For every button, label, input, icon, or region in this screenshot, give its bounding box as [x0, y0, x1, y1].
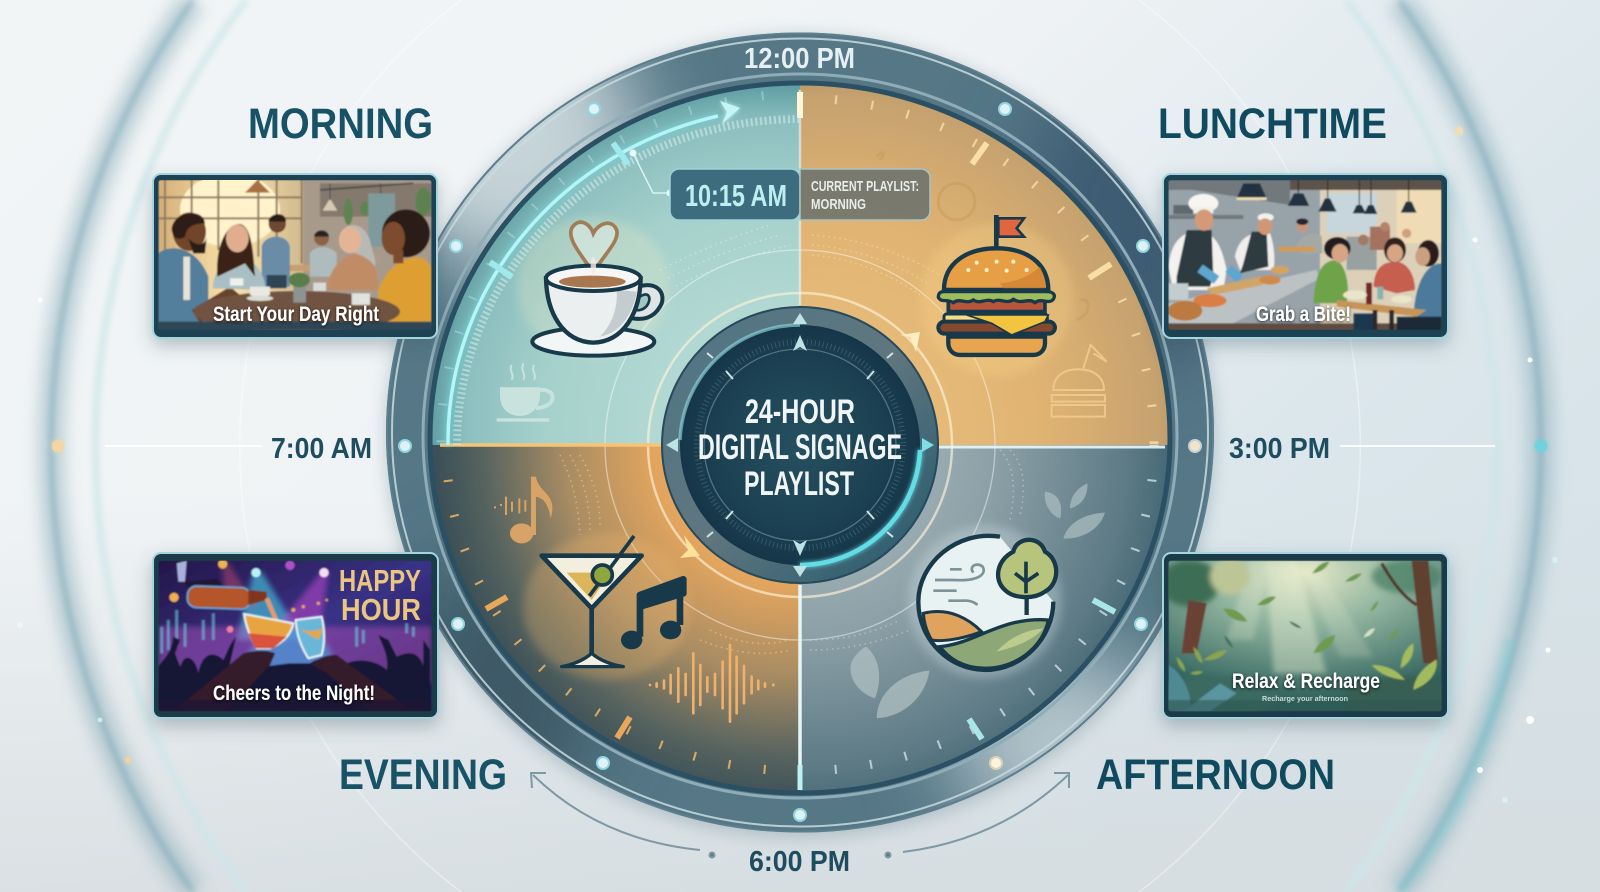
caption: Start Your Day Right	[213, 303, 379, 326]
arrow: evening direction	[531, 773, 714, 858]
morning cafe scene	[158, 173, 432, 332]
icon: burger	[920, 215, 1073, 377]
happy hour sign: HOUR	[341, 592, 421, 627]
sparkle dots	[17, 127, 1558, 803]
happy hour sign: HAPPY	[339, 563, 421, 598]
icon: small ghost coffee	[497, 363, 553, 422]
heading: MORNING: MORNING	[248, 100, 433, 148]
time label: 12:00 PM: 12:00 PM	[744, 43, 855, 75]
icon: ghost leaves upper	[1045, 483, 1105, 539]
panel: lunchtime screen	[1163, 174, 1448, 338]
arrow: afternoon direction	[886, 773, 1069, 858]
center hub	[662, 307, 938, 583]
hub title: 24-HOUR	[745, 393, 855, 431]
panel: afternoon screen	[1147, 553, 1460, 718]
caption: Grab a Bite!	[1256, 303, 1351, 326]
heading: AFTERNOON: AFTERNOON	[1096, 751, 1335, 799]
dial outer ring	[380, 10, 1240, 838]
dotted wave textures	[560, 225, 1023, 653]
dial face quadrants	[430, 83, 1170, 793]
panel: happy hour screen	[153, 553, 438, 718]
icon: martini with note	[523, 533, 690, 680]
hub title	[698, 393, 902, 503]
callout: current time: MORNING	[811, 197, 866, 213]
nightclub scene	[158, 559, 432, 711]
minute ticks	[441, 94, 1159, 788]
time label: 6:00 PM: 6:00 PM	[749, 846, 850, 878]
hub title: PLAYLIST	[744, 465, 854, 503]
callout: current time: CURRENT PLAYLIST:	[811, 179, 919, 195]
progress arc with arrow	[442, 100, 800, 448]
time label: 3:00 PM: 3:00 PM	[1229, 433, 1330, 465]
waveform	[650, 645, 773, 722]
icon: small ghost steam	[877, 153, 1088, 320]
major ticks	[486, 143, 1115, 739]
restaurant kitchen scene	[1168, 180, 1442, 330]
icon: ghost leaves lower	[850, 647, 929, 718]
panel: morning screen	[153, 173, 437, 338]
heading: LUNCHTIME: LUNCHTIME	[1158, 100, 1387, 148]
icon: landscape with tree	[908, 525, 1062, 678]
icon: coffee cup	[517, 217, 670, 357]
callout: current time	[670, 169, 930, 220]
heading: EVENING: EVENING	[339, 751, 507, 799]
icon: ghost note	[494, 477, 552, 543]
forest scene	[1168, 560, 1442, 712]
caption: Relax & Recharge	[1232, 670, 1380, 693]
quadrant dividers	[436, 90, 1165, 790]
time label: 7:00 AM: 7:00 AM	[271, 433, 372, 465]
hub title: DIGITAL SIGNAGE	[698, 428, 902, 467]
caption: Cheers to the Night!	[213, 682, 375, 705]
happy hour sign	[339, 563, 421, 627]
sub-caption: Recharge your afternoon	[1262, 696, 1348, 703]
callout: current time: 10:15 AM	[685, 178, 787, 213]
concentric guide rings	[605, 250, 995, 640]
ring indicator dots	[399, 103, 1201, 821]
icon: small ghost burger	[1052, 345, 1107, 417]
